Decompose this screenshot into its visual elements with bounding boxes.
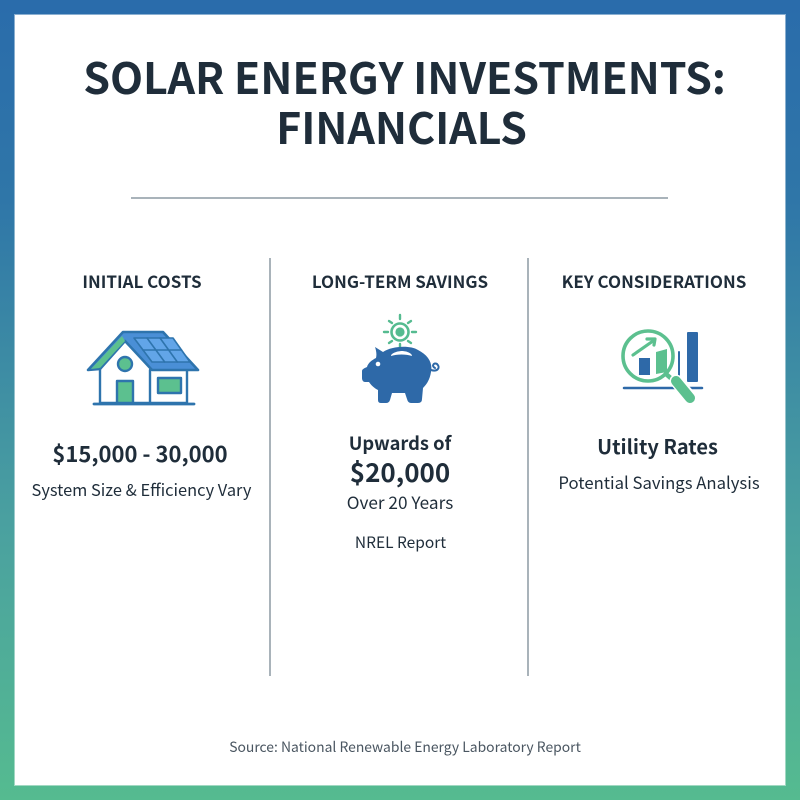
source note: Source: National Renewable Energy Laboratory Report xyxy=(229,737,581,757)
cost figure: $15,000 - 30,000 xyxy=(52,437,228,469)
considerations note: Potential Savings Analysis xyxy=(558,470,760,494)
panel: long-term savings xyxy=(312,268,488,553)
icon: solar house xyxy=(86,330,200,406)
savings reference: NREL Report xyxy=(355,531,446,553)
savings period: Over 20 Years xyxy=(347,489,453,514)
savings figure: $20,000 xyxy=(350,453,450,490)
heading: long-term savings: LONG-TERM SAVINGS xyxy=(312,268,488,293)
heading: key considerations: KEY CONSIDERATIONS xyxy=(562,268,746,293)
heading: initial costs: INITIAL COSTS xyxy=(82,268,202,293)
panel: key considerations xyxy=(558,268,760,494)
panel: initial costs xyxy=(32,268,252,501)
title xyxy=(83,45,726,157)
considerations heading: Utility Rates xyxy=(597,431,718,460)
icon: piggy bank with sun xyxy=(362,314,440,403)
title: SOLAR ENERGY INVESTMENTS: xyxy=(83,45,726,107)
savings label: Upwards of xyxy=(349,430,451,456)
icon: magnifier over chart xyxy=(621,329,704,403)
cost note: System Size & Efficiency Vary xyxy=(32,477,251,501)
title: FINANCIALS xyxy=(276,95,527,157)
